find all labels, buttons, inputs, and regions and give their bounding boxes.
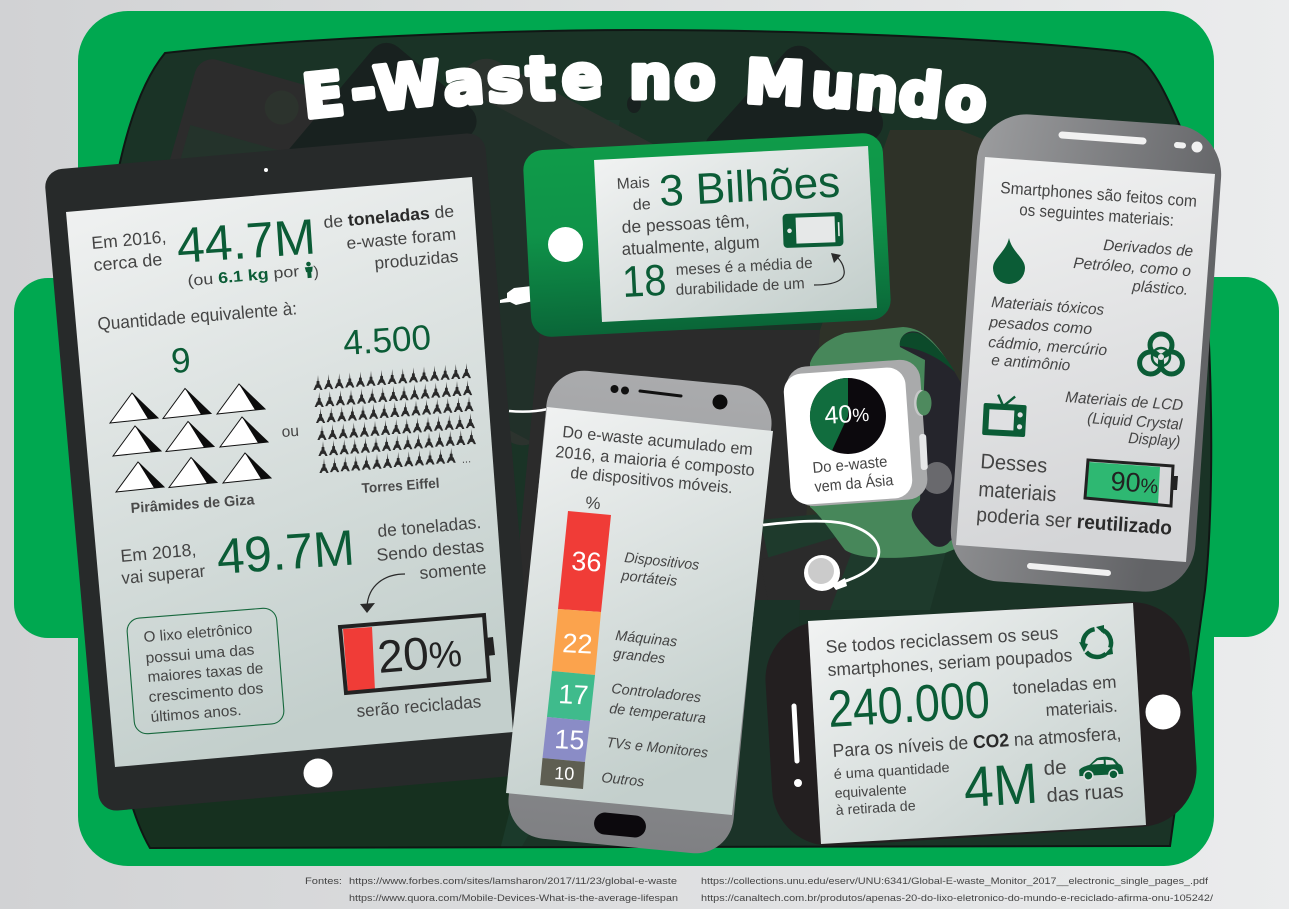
text: from Asia: vem da Ásia bbox=[814, 472, 894, 496]
tablet home button bbox=[304, 758, 332, 788]
tag body bbox=[522, 132, 892, 338]
icon: Eiffel towers grid: ... bbox=[461, 453, 471, 466]
watch button bbox=[919, 434, 928, 470]
chart axis label: % bbox=[585, 493, 601, 513]
text: petroleum bbox=[1073, 237, 1194, 299]
stacked bar chart bbox=[540, 511, 611, 789]
text: petroleum: Derivados de bbox=[1103, 237, 1194, 260]
text: materials intro bbox=[1000, 179, 1197, 230]
chart labels: Outros bbox=[601, 770, 645, 790]
icon: battery 20%: 20% bbox=[375, 624, 464, 683]
chart labels: TVs e Monitores bbox=[606, 735, 709, 762]
stat: 4.500 towers: 4.500 bbox=[342, 318, 432, 363]
phone body bbox=[505, 367, 775, 857]
text: recycle intro bbox=[825, 623, 1073, 680]
text: tonnes produced: e-waste foram bbox=[346, 224, 457, 253]
text: tonnes materials bbox=[1012, 672, 1118, 720]
sources footer: https://collections.unu.edu/eserv/UNU:6341/Global-E-waste_Monitor_2017__electronic_single_pages_.pdf bbox=[701, 876, 1208, 887]
text: tonnes materials: materiais. bbox=[1045, 696, 1118, 720]
text: equivalent bbox=[833, 759, 950, 818]
text: people: de pessoas têm, bbox=[621, 210, 750, 237]
text: 2018 intro bbox=[120, 539, 206, 588]
text: reuse bbox=[976, 450, 1173, 540]
chart labels: de temperatura bbox=[609, 701, 707, 727]
pie chart: 40% bbox=[810, 378, 886, 454]
text: people: atualmente, algum bbox=[621, 232, 760, 259]
panel: right gray phone bbox=[947, 111, 1225, 595]
text: 2018 intro: Em 2018, bbox=[120, 539, 197, 566]
icon: pyramids grid bbox=[110, 384, 271, 492]
callout: growth rate: maiores taxas de bbox=[147, 660, 264, 686]
callout: growth rate bbox=[126, 607, 285, 735]
pie chart: 40%: 40% bbox=[823, 399, 870, 430]
text: toxic metals bbox=[988, 294, 1108, 375]
chart labels: Máquinas bbox=[615, 628, 678, 650]
icon: oil drop bbox=[993, 238, 1025, 284]
text: 2016 intro: cerca de bbox=[93, 249, 163, 275]
text: accumulated: 2016, a maioria é composto bbox=[555, 443, 755, 480]
sources footer: https://canaltech.com.br/produtos/apenas-20-do-lixo-eletronico-do-mundo-e-reciclado-afirma-onu-105242/ bbox=[701, 893, 1213, 904]
text: toxic metals: cádmio, mercúrio bbox=[988, 334, 1108, 359]
text: months: durabilidade de um bbox=[675, 275, 805, 299]
heading: equivalence: Quantidade equivalente à: bbox=[97, 298, 298, 334]
icon: person bbox=[304, 261, 314, 278]
sources footer: Fontes: bbox=[305, 876, 342, 887]
text: 2016 intro: Em 2016, bbox=[91, 227, 167, 253]
phone body bbox=[947, 111, 1225, 595]
text: LCD: Display) bbox=[1128, 430, 1181, 451]
chart labels: portáteis bbox=[620, 568, 678, 590]
text: tonnes materials: toneladas em bbox=[1012, 672, 1117, 698]
label: recycled: serão recicladas bbox=[356, 691, 482, 721]
text: LCD: (Liquid Crystal bbox=[1087, 410, 1183, 434]
stacked bar chart: 17 bbox=[558, 679, 589, 711]
stat: 44.7M: 44.7M bbox=[175, 208, 317, 274]
icon: car bbox=[1079, 756, 1124, 781]
panel: green phone tag bbox=[522, 132, 892, 338]
text: petroleum: Petróleo, como o bbox=[1073, 255, 1192, 280]
panel: landscape phone bbox=[762, 599, 1200, 849]
text: 2018 tonnes bbox=[376, 512, 487, 583]
text: recycle intro: smartphones, seriam poupados bbox=[827, 645, 1073, 680]
icon: battery 90% bbox=[1085, 460, 1178, 506]
tag hole bbox=[548, 227, 583, 262]
text: 2018 tonnes: Sendo destas bbox=[376, 536, 485, 565]
panel: front silver phone bbox=[505, 367, 775, 857]
icon: recycle bbox=[1079, 625, 1113, 657]
watch body bbox=[785, 358, 929, 508]
text: mais de: Mais bbox=[616, 174, 650, 193]
phone body bbox=[762, 599, 1200, 849]
text: from Asia: Do e-waste bbox=[812, 454, 888, 477]
text: equivalent: equivalente bbox=[834, 781, 907, 801]
stat: 49.7M: 49.7M bbox=[215, 519, 356, 585]
text: reuse: poderia ser reutilizado bbox=[976, 504, 1173, 540]
text: mais de bbox=[616, 174, 651, 214]
icon: earphone bbox=[763, 521, 879, 591]
watch strap bbox=[810, 327, 965, 558]
text: 2018 tonnes: de toneladas. bbox=[377, 512, 482, 541]
text: reuse: materiais bbox=[978, 478, 1057, 506]
text: equivalent: é uma quantidade bbox=[833, 759, 950, 782]
text: accumulated: Do e-waste acumulado em bbox=[562, 423, 753, 459]
cable: charger bbox=[500, 286, 548, 412]
icon: Eiffel towers grid bbox=[313, 363, 476, 473]
tag screen bbox=[594, 146, 877, 322]
text: months bbox=[675, 255, 813, 299]
sources footer: https://www.quora.com/Mobile-Devices-What-is-the-average-lifespan bbox=[349, 893, 678, 904]
text: toxic metals: pesados como bbox=[988, 314, 1093, 338]
text: 2016 intro bbox=[91, 227, 167, 275]
watch side bump bbox=[922, 462, 952, 494]
text: CO2: Para os níveis de CO2 na atmosfera, bbox=[832, 722, 1122, 761]
icon: battery 90%: 90% bbox=[1110, 466, 1160, 499]
text: ou: ou bbox=[281, 423, 299, 441]
icon: biohazard bbox=[1140, 334, 1182, 374]
callout: growth rate: últimos anos. bbox=[150, 702, 242, 726]
icon: battery 20% bbox=[340, 615, 495, 693]
stacked bar chart: 36 bbox=[571, 546, 602, 578]
phone screen bbox=[808, 603, 1146, 844]
icon: tv bbox=[982, 394, 1027, 437]
text: toxic metals: Materiais tóxicos bbox=[991, 294, 1105, 319]
text: tonnes produced: produzidas bbox=[374, 247, 459, 273]
text: LCD: Materiais de LCD bbox=[1065, 389, 1184, 414]
title: E-Waste no Mundo bbox=[299, 42, 991, 138]
stat: 9 pyramids: 9 bbox=[170, 341, 192, 381]
watch face bbox=[783, 366, 913, 506]
text: people bbox=[621, 210, 760, 259]
phone sensors bbox=[610, 385, 728, 410]
callout: growth rate: possui uma das bbox=[145, 641, 255, 667]
phone speaker bbox=[794, 706, 802, 787]
text: accumulated bbox=[555, 423, 755, 497]
tablet screen bbox=[66, 177, 513, 767]
stat: 240.000: 240.000 bbox=[826, 671, 991, 739]
phone home button bbox=[593, 812, 647, 838]
tablet camera bbox=[264, 168, 268, 172]
stacked bar chart: 15 bbox=[554, 724, 585, 756]
panel: smartwatch bbox=[783, 327, 965, 558]
text: petroleum: plástico. bbox=[1131, 278, 1189, 299]
text: mais de: de bbox=[632, 196, 651, 214]
text: tonnes produced: de toneladas de bbox=[323, 202, 455, 232]
arrow: to battery bbox=[360, 574, 405, 613]
chart labels: Dispositivos bbox=[624, 550, 700, 574]
text: de das ruas: das ruas bbox=[1046, 780, 1124, 807]
text: toxic metals: e antimônio bbox=[991, 352, 1071, 375]
icon: smartphone bbox=[782, 212, 844, 248]
text: de das ruas bbox=[1043, 757, 1124, 807]
stacked bar chart: 22 bbox=[562, 628, 593, 660]
stat: 4M: 4M bbox=[962, 752, 1040, 820]
text: months: meses é a média de bbox=[675, 255, 813, 279]
stat: 18: 18 bbox=[621, 256, 667, 307]
panel: tablet bbox=[44, 132, 540, 812]
chart labels: Controladores bbox=[611, 681, 702, 706]
text: materials intro: os seguintes materiais: bbox=[1019, 201, 1175, 230]
stat: 3 Bilhões: 3 Bilhões bbox=[658, 158, 841, 216]
stacked bar chart: 10 bbox=[554, 763, 575, 784]
text: tonnes produced bbox=[323, 202, 459, 273]
watch crown bbox=[914, 390, 932, 416]
sources footer bbox=[305, 876, 1213, 904]
text: equivalent: à retirada de bbox=[835, 797, 916, 818]
text: LCD bbox=[1065, 389, 1184, 451]
callout: growth rate: O lixo eletrônico bbox=[143, 620, 253, 646]
text: 2018 tonnes: somente bbox=[419, 557, 487, 583]
arrow: to smartphone bbox=[814, 253, 844, 285]
text: de das ruas: de bbox=[1043, 757, 1067, 780]
text: recycle intro: Se todos reciclassem os seus bbox=[825, 623, 1059, 657]
per capita note: (ou 6.1 kg por bbox=[187, 263, 300, 290]
text: accumulated: de dispositivos móveis. bbox=[570, 464, 734, 497]
phone speakers bbox=[1030, 135, 1202, 573]
phone screen bbox=[956, 157, 1215, 562]
text: from Asia bbox=[812, 454, 894, 496]
phone screen bbox=[506, 407, 773, 815]
sources footer: https://www.forbes.com/sites/lamsharon/2017/11/23/global-e-waste bbox=[349, 876, 677, 887]
label: pyramids: Pirâmides de Giza bbox=[130, 492, 256, 517]
text: reuse: Desses bbox=[980, 450, 1048, 478]
chart labels bbox=[601, 550, 709, 790]
text: materials intro: Smartphones são feitos com bbox=[1000, 179, 1197, 211]
label: towers: Torres Eiffel bbox=[361, 475, 440, 496]
text: 2018 intro: vai superar bbox=[121, 561, 206, 588]
phone home button bbox=[1146, 694, 1180, 730]
per capita note: ) bbox=[313, 264, 320, 281]
tablet body bbox=[44, 132, 540, 812]
chart labels: grandes bbox=[613, 646, 666, 667]
callout: growth rate: crescimento dos bbox=[148, 680, 264, 706]
